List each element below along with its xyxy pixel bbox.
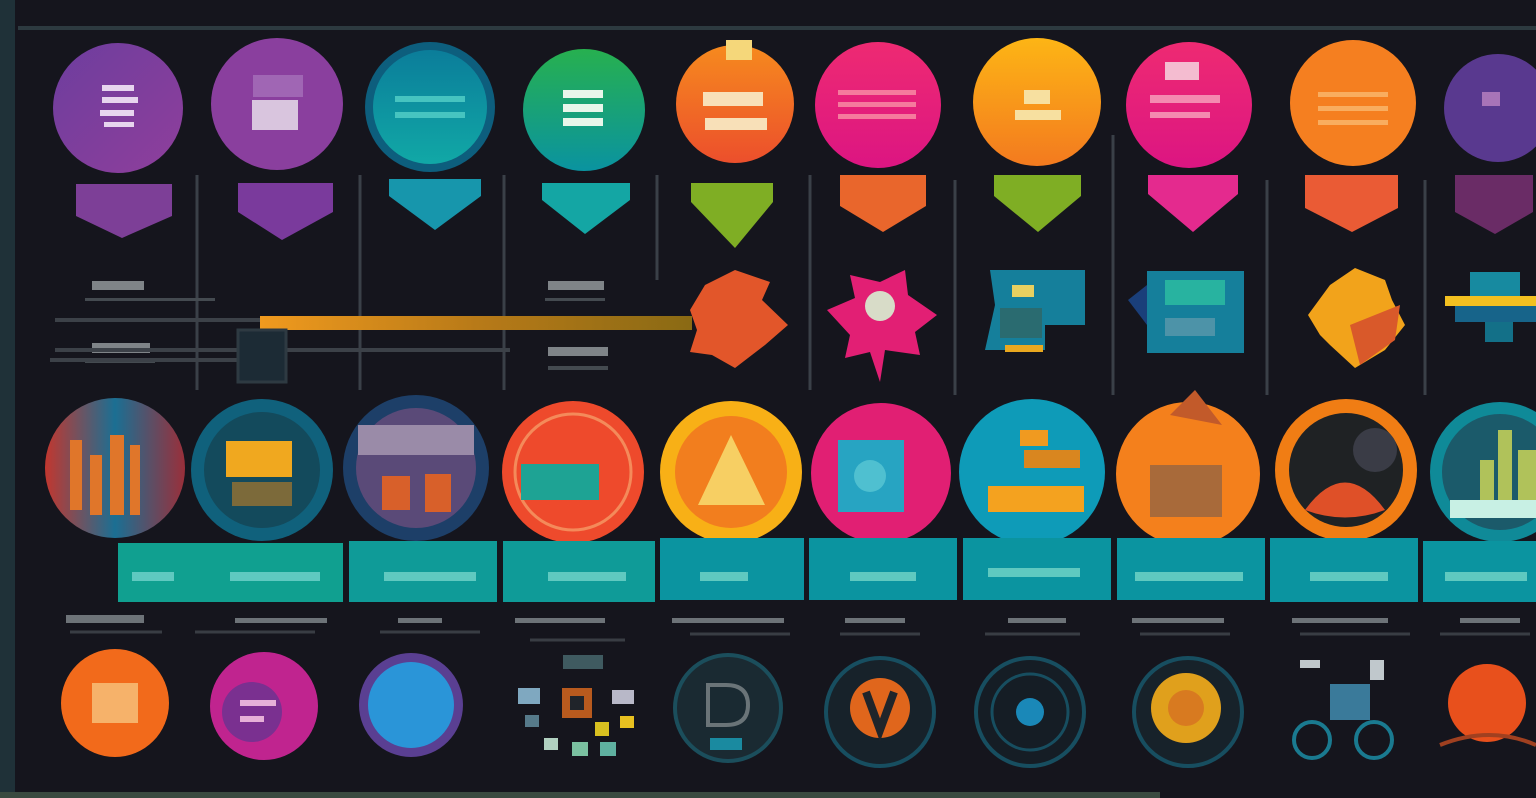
shield orange 2 [1305, 175, 1398, 232]
circle 7 yellow [973, 38, 1101, 166]
big circle: bars [45, 398, 185, 538]
shield teal 1 [389, 179, 481, 230]
big circle: orange [1116, 390, 1260, 546]
yellow platform icon [1445, 272, 1536, 342]
circle 10 purple [1444, 54, 1536, 162]
big circle: yellow [660, 401, 802, 543]
row 4: large circles [45, 390, 1536, 546]
shield green 1 [691, 183, 773, 248]
circle 1 purple [53, 43, 183, 173]
shield teal 2 [542, 183, 630, 234]
label block 2 [85, 343, 155, 363]
circle 6 pink [815, 42, 941, 168]
circle 8 pink [1126, 42, 1252, 168]
banner segments [118, 538, 1536, 602]
shield orange 1 [840, 175, 926, 232]
big circle: orange ring [1275, 399, 1417, 541]
dark ring blue [976, 658, 1084, 766]
circle 9 orange [1290, 40, 1416, 166]
connector node [238, 330, 286, 382]
dark ring D [675, 655, 781, 761]
shield pink [1148, 175, 1238, 232]
row 5: captions [66, 615, 1530, 640]
label block 1 [85, 281, 215, 301]
small circle pink [210, 652, 318, 760]
small orange blob [1440, 664, 1536, 745]
row 2: funnel shields [76, 175, 1533, 248]
row 3: labels and connector [50, 268, 1536, 382]
small circle blue [359, 653, 463, 757]
orange connector line [260, 316, 692, 330]
pink burst [827, 270, 937, 382]
network icon [1294, 660, 1392, 758]
shield green 2 [994, 175, 1081, 232]
teal banner row [118, 538, 1536, 602]
label block 3 [545, 281, 605, 301]
big circle: teal [959, 399, 1105, 545]
circle 3 teal [365, 42, 495, 172]
shield purple 2 [238, 183, 333, 240]
big circle: red [502, 401, 644, 543]
teal box icon [985, 270, 1085, 352]
small circle orange [61, 649, 169, 757]
grey connector lines [50, 320, 510, 360]
dark ring orange V [826, 658, 934, 766]
shield purple 1 [76, 184, 172, 238]
big circle: purple scene [343, 395, 489, 541]
orange burst [690, 270, 788, 368]
dark ring gold [1134, 658, 1242, 766]
teal screen icon [1128, 271, 1244, 353]
shield dark purple [1455, 175, 1533, 234]
row 5: small icons [61, 649, 1536, 766]
cluster icon [518, 655, 634, 756]
banner labels [132, 568, 1527, 581]
circle 5 orange [676, 40, 794, 163]
big circle: teal chart [1430, 402, 1536, 542]
big circle: pink [811, 403, 951, 543]
label block 4 [548, 347, 608, 370]
yellow burst [1308, 268, 1405, 368]
circle 4 green [523, 49, 645, 171]
big circle: screen [191, 399, 333, 541]
row 1: top circles [53, 38, 1536, 173]
circle 2 purple [211, 38, 343, 170]
